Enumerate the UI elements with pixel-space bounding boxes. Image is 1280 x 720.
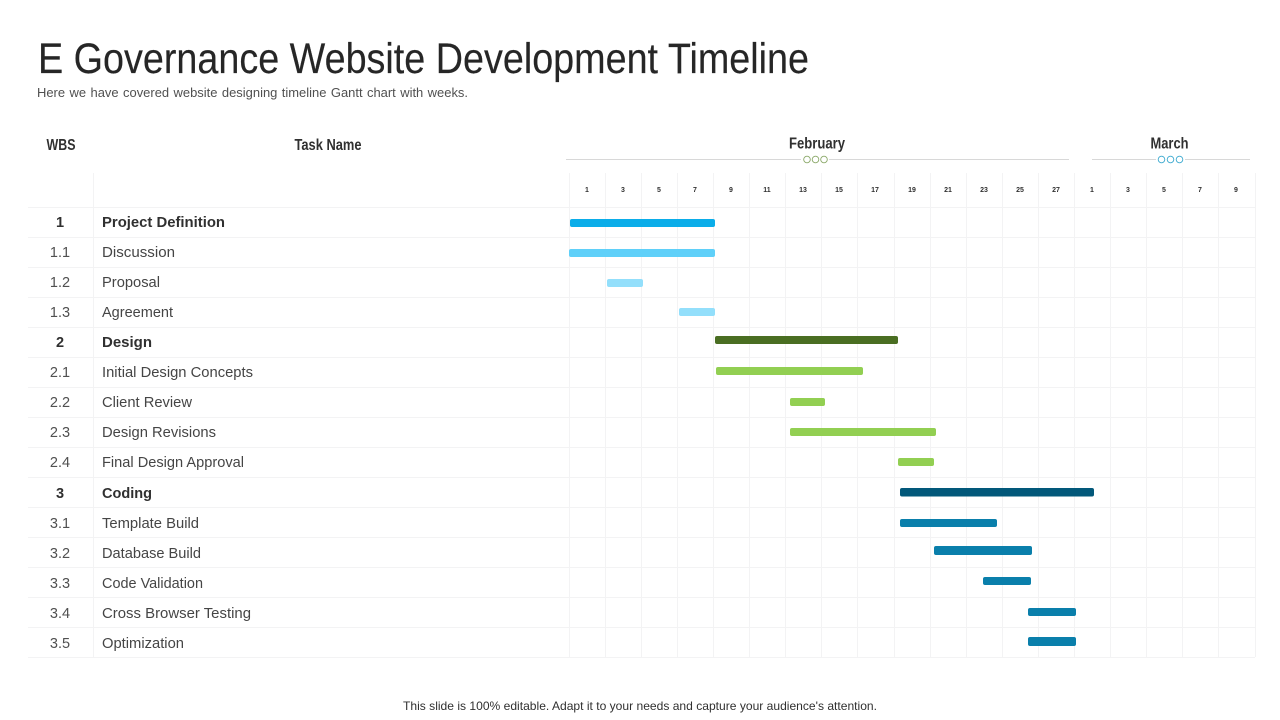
date scale: 11 [763,187,771,194]
date scale: 15 [835,187,843,194]
date scale: 9 [729,187,733,194]
month header: March [1092,136,1250,165]
WBS numbers: 2 [56,335,64,351]
task names: Optimization [102,636,184,652]
WBS numbers: 3.4 [50,606,70,622]
WBS numbers: 1 [56,215,64,231]
date scale: 5 [657,187,661,194]
date scale: 13 [799,187,807,194]
date scale: 3 [1126,187,1130,194]
task names: Design Revisions [102,425,216,441]
month header: March: March [1150,136,1188,152]
month header: February [566,136,1069,165]
date scale: 1 [1090,187,1094,194]
date scale: 19 [908,187,916,194]
task names: Discussion [102,245,175,261]
WBS numbers: 3.1 [50,516,70,532]
task names: Proposal [102,275,160,291]
WBS numbers: 3.5 [50,636,70,652]
WBS numbers: 1.2 [50,275,70,291]
WBS numbers: 2.3 [50,425,70,441]
task names: Client Review [102,395,193,411]
WBS numbers: 1.1 [50,245,70,261]
gantt bars: design [715,336,936,466]
month header: February: February [789,136,845,152]
date scale: 25 [1016,187,1024,194]
date scale [585,187,1238,194]
task names: Final Design Approval [102,455,244,471]
WBS numbers: 3.2 [50,546,70,562]
WBS numbers: 3 [56,486,64,502]
task names: Initial Design Concepts [102,365,253,381]
date scale: 9 [1234,187,1238,194]
date scale: 17 [871,187,879,194]
task names: Database Build [102,546,201,562]
subtitle: Here we have covered website designing timeline Gantt chart with weeks. [37,86,468,100]
date scale: 5 [1162,187,1166,194]
gantt bars: coding [900,488,1094,646]
footer note: This slide is 100% editable. Adapt it to your needs and capture your audience's attention. [403,699,877,713]
WBS numbers: 3.3 [50,576,70,592]
date scale: 21 [944,187,952,194]
WBS numbers: 2.1 [50,365,70,381]
date scale: 7 [1198,187,1202,194]
task names: Code Validation [102,576,203,592]
WBS numbers: 2.4 [50,455,70,471]
title: E Governance Website Development Timeline [38,35,809,83]
task names: Agreement [102,305,173,321]
task names: Project Definition [102,215,225,231]
task names: Design [102,335,152,351]
task names [102,215,253,652]
date scale: 27 [1052,187,1060,194]
date scale: 3 [621,187,625,194]
task names: Template Build [102,516,199,532]
date scale: 1 [585,187,589,194]
gantt bars: project definition [569,219,715,316]
task names: Cross Browser Testing [102,606,251,622]
column heading: Task Name: Task Name [294,137,362,154]
WBS numbers [50,215,70,652]
column heading: WBS: WBS [46,137,76,154]
date scale: 7 [693,187,697,194]
task names: Coding [102,486,152,502]
date scale: 23 [980,187,988,194]
WBS numbers: 1.3 [50,305,70,321]
WBS numbers: 2.2 [50,395,70,411]
